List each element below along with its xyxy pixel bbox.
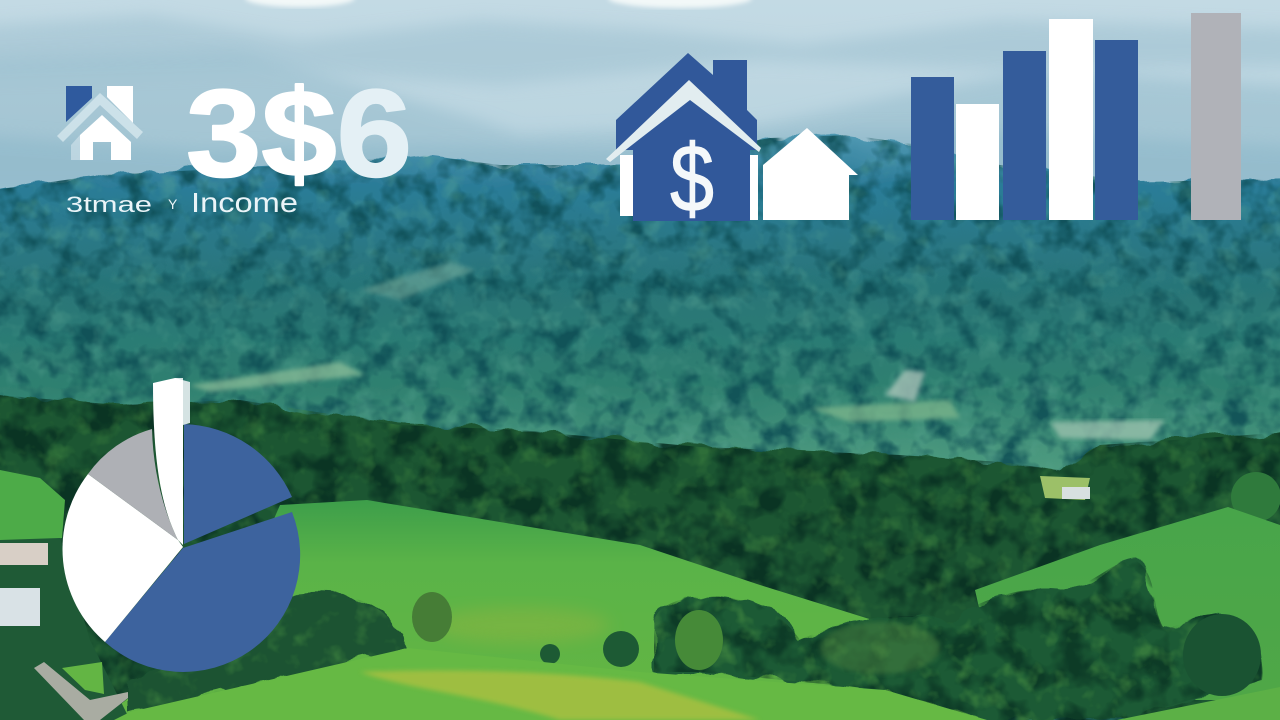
background: dark tree line [0,385,1280,720]
income label: Income [191,187,298,218]
icon: small white house [763,128,858,220]
dollar sign: $ [670,125,714,232]
background: foreground trees [120,560,1280,720]
stat number: 3$6 [186,65,412,203]
slice: large blue [105,512,300,672]
bar chart [911,13,1241,220]
pie chart [62,378,300,672]
income label: 3tmae [66,192,152,217]
slice: white [62,474,183,642]
income label [66,187,298,218]
slice: white pull-out [153,378,183,545]
icon: large house with dollar sign [606,53,858,232]
background: distant blue-green forest [0,130,1280,475]
income label: Y [168,196,178,212]
slice: gray [88,429,178,540]
house icon with stat [57,65,412,218]
background: green fields [0,470,1280,720]
icon: small house [57,86,143,160]
background: lower field [114,648,1280,720]
background: hazy sky and distant mountains [0,0,1280,240]
background: left village and road [0,538,130,720]
slice: upper blue [184,424,292,544]
